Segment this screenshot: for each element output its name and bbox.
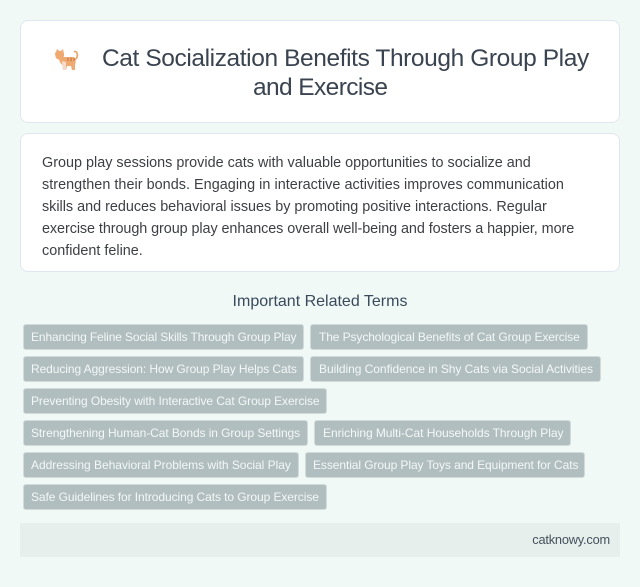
tag: Essential Group Play Toys and Equipment for Cats: [313, 458, 578, 472]
tag: [310, 324, 588, 350]
tag: [23, 420, 308, 446]
tag: Building Confidence in Shy Cats via Social Activities: [319, 362, 593, 376]
tag: Enhancing Feline Social Skills Through Group Play: [31, 330, 296, 344]
description line 5: confident feline.: [42, 243, 143, 259]
tag: Preventing Obesity with Interactive Cat Group Exercise: [31, 394, 319, 408]
tag: [305, 452, 585, 478]
tag: [23, 452, 299, 478]
description line 3: skills and reduces behavioral issues by promoting positive interactions. Regular: [42, 199, 547, 215]
description line 2: strengthen their bonds. Engaging in interactive activities improves communication: [42, 177, 564, 193]
tag list: [23, 324, 601, 510]
tag: Strengthening Human-Cat Bonds in Group Settings: [31, 426, 300, 440]
tag: The Psychological Benefits of Cat Group Exercise: [319, 330, 580, 344]
panel: description card: [20, 133, 620, 272]
tag: [310, 356, 601, 382]
tag: [23, 324, 304, 350]
tag: [23, 388, 327, 414]
tag: Addressing Behavioral Problems with Social Play: [31, 458, 291, 472]
tag: [23, 484, 327, 510]
heading line 2: and Exercise: [253, 74, 387, 101]
tag: [314, 420, 571, 446]
footer source: catknowy.com: [532, 532, 610, 547]
description line 4: exercise through group play enhances overall well-being and fosters a happier, more: [42, 221, 574, 237]
description line 1: Group play sessions provide cats with valuable opportunities to socialize and: [42, 155, 531, 171]
icon: cat: [55, 49, 78, 70]
heading line 1: Cat Socialization Benefits Through Group Play: [102, 45, 589, 72]
panel: title card: [20, 20, 620, 123]
tag: Enriching Multi-Cat Households Through Play: [323, 426, 563, 440]
tag: [23, 356, 304, 382]
footer bar: [20, 523, 620, 557]
tag: Safe Guidelines for Introducing Cats to Group Exercise: [31, 490, 319, 504]
tag: Reducing Aggression: How Group Play Helps Cats: [31, 362, 297, 376]
heading: related terms: Important Related Terms: [233, 293, 407, 310]
